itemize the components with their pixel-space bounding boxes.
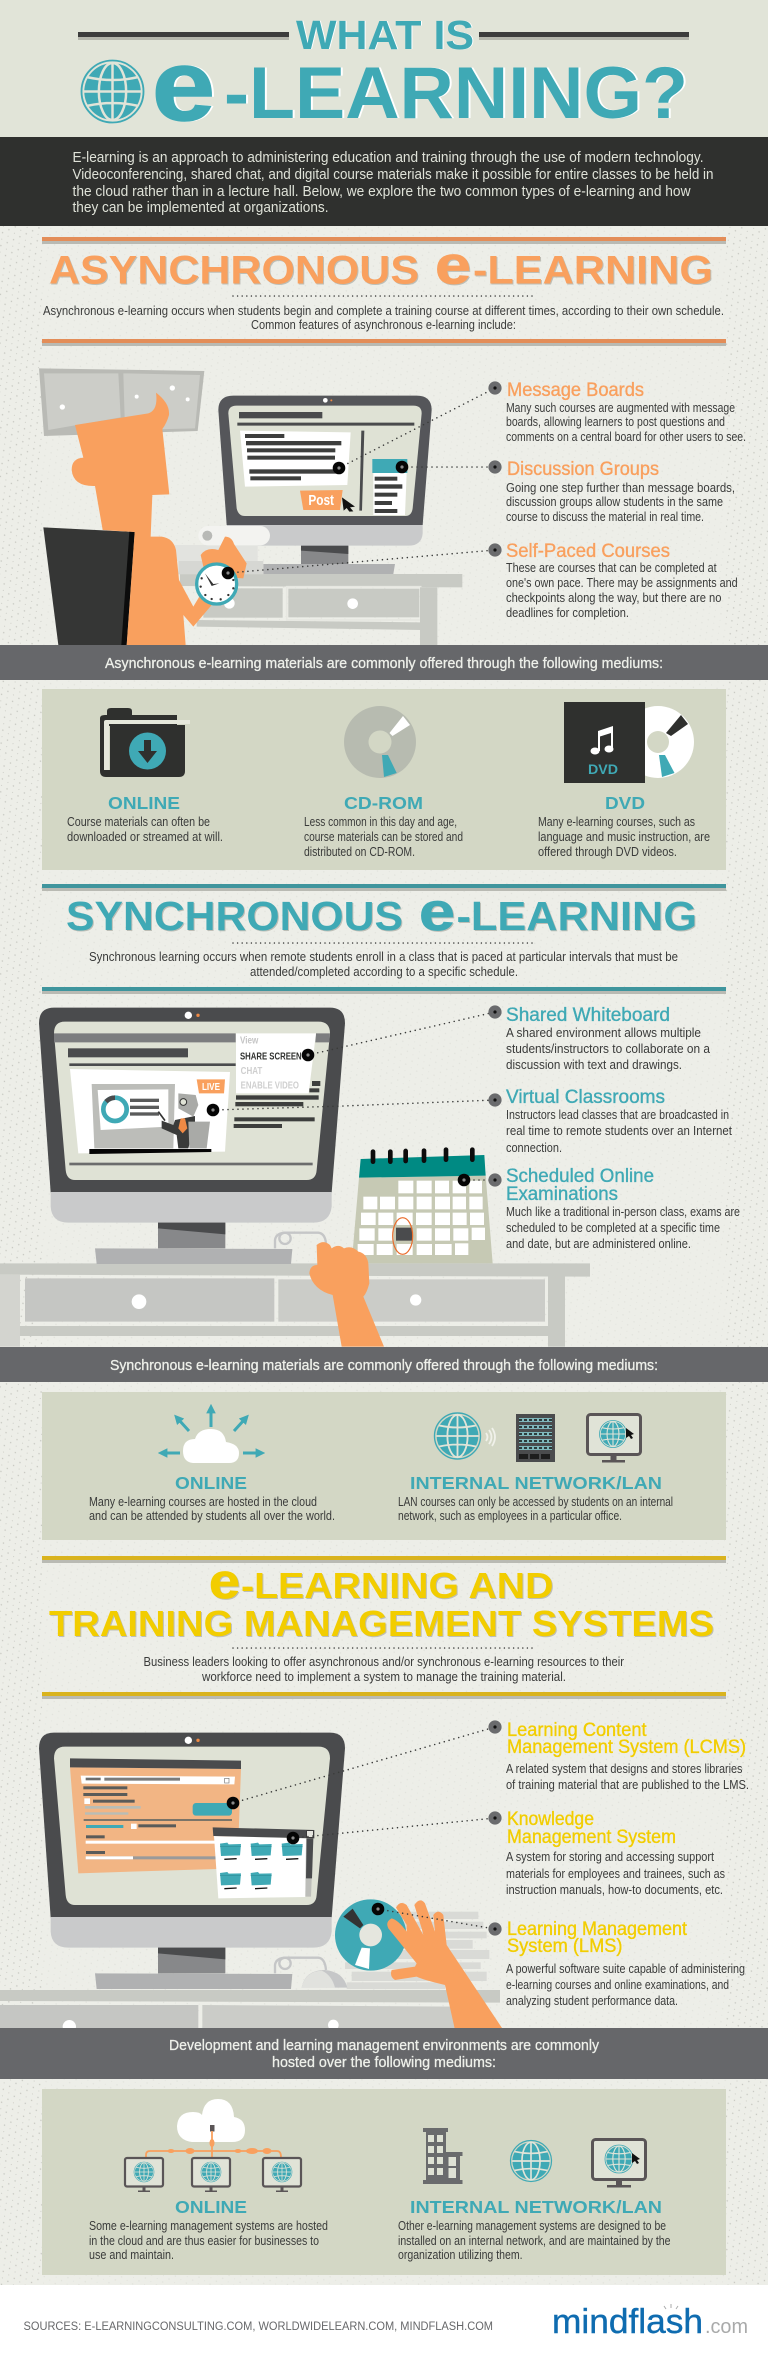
medium: online: [89, 2197, 328, 2262]
medium: online: Some e-learning management systems are hosted: [89, 2218, 328, 2233]
feature: shared whiteboard: discussion with text and drawings.: [506, 1057, 682, 1072]
hand: [309, 1242, 384, 1347]
medium: dvd: [538, 793, 710, 859]
person: [43, 393, 247, 645]
desk: [0, 1263, 590, 1347]
section heading: synchronous: attended/completed according to a specific schedule.: [250, 964, 518, 979]
band: synchronous mediums intro: [0, 1347, 768, 1382]
icon: globe: [434, 1413, 480, 1459]
section heading: synchronous: [42, 882, 726, 994]
feature: discussion groups: [506, 459, 735, 524]
footer: [24, 2303, 748, 2341]
title line: what is: WHAT IS: [296, 12, 474, 58]
medium: online: ONLINE: [175, 1473, 247, 1493]
feature: virtual classrooms: connection.: [506, 1140, 562, 1155]
post button: Post: [308, 493, 334, 509]
mouse cord: [275, 1233, 326, 1248]
intro band: E-learning is an approach to administering education and training through the use of modern technology.: [72, 150, 704, 166]
medium: dvd: Many e-learning courses, such as: [538, 814, 695, 829]
section heading: asynchronous: Common features of asynchronous e-learning include:: [251, 317, 516, 332]
hand: [387, 1900, 503, 2030]
feature: message boards: [506, 380, 746, 444]
menu: [236, 1033, 316, 1093]
callouts: asynchronous features: [222, 380, 746, 620]
logo: mindflash: .com: [705, 2316, 748, 2338]
feature: lms: Learning Management: [507, 1919, 688, 1940]
feature: knowledge management system: [506, 1809, 725, 1897]
medium: internal network: network, such as employees in a particular office.: [398, 1508, 622, 1523]
medium: internal network: LAN courses can only be accessed by students on an internal: [398, 1494, 673, 1509]
medium: internal network: INTERNAL NETWORK/LAN: [410, 1473, 662, 1493]
feature: scheduled online examinations: [506, 1166, 740, 1251]
window: [39, 368, 204, 436]
icon: dvd case: [564, 702, 694, 783]
feature: lms: System (LMS): [507, 1936, 622, 1957]
band: asynchronous mediums intro: [0, 645, 768, 680]
medium: cd-rom: distributed on CD-ROM.: [304, 844, 415, 859]
section heading: synchronous: Synchronous learning occurs when remote students enroll in a class that is paced at particular intervals that must be: [89, 949, 678, 964]
intro band: they can be implemented at organizations.: [72, 200, 328, 216]
monitor: [39, 1008, 345, 1264]
illustration: management system monitor, disc and hand: [0, 1733, 503, 2033]
live lecture: LIVE: [202, 1082, 220, 1093]
feature: virtual classrooms: Virtual Classrooms: [506, 1087, 665, 1108]
menu: CHAT: [241, 1066, 262, 1077]
feature: lcms: [506, 1720, 749, 1792]
sources: SOURCES: E-LEARNINGCONSULTING.COM, WORLDWIDELEARN.COM, MINDFLASH.COM: [24, 2321, 493, 2333]
section heading: management systems: [42, 1555, 726, 1699]
leader lines: [213, 1012, 495, 1180]
illustration: live class on monitor, calendar and hand: [0, 1008, 590, 1347]
screen content: [54, 1033, 330, 1165]
feature: lcms: Learning Content: [507, 1720, 647, 1741]
leader lines: [233, 1727, 495, 1929]
section heading: management systems: Business leaders looking to offer asynchronous and/or synchronous e-learning resources to their: [144, 1654, 625, 1669]
medium: online: [89, 1473, 335, 1523]
medium: online: and can be attended by students all over the world.: [89, 1508, 335, 1523]
feature: shared whiteboard: Shared Whiteboard: [506, 1005, 670, 1026]
desk: [180, 574, 462, 646]
band: synchronous mediums intro: Synchronous e-learning materials are commonly offered through the following mediums:: [110, 1357, 658, 1374]
icon: wifi signal: [486, 1428, 495, 1446]
icon: download folder: [100, 708, 190, 777]
feature: message boards: Message Boards: [507, 380, 644, 401]
callouts: management systems: [227, 1720, 749, 2008]
menu: ENABLE VIDEO: [241, 1081, 299, 1092]
feature: scheduled online examinations: Scheduled Online: [506, 1166, 654, 1187]
section heading: management systems: TRAINING MANAGEMENT SYSTEMS: [49, 1603, 714, 1644]
medium: online: [67, 793, 223, 844]
logo: mindflash: mindflash: [552, 2303, 703, 2341]
feature: knowledge management system: A system for storing and accessing support: [506, 1849, 714, 1864]
icon: cloud network: [125, 2099, 301, 2192]
medium: internal network: organization utilizing them.: [398, 2247, 522, 2262]
feature: lms: [506, 1919, 745, 2008]
header: [0, 0, 768, 142]
icon: office building: [423, 2128, 462, 2184]
panel: management mediums: [42, 2089, 726, 2275]
feature: self-paced courses: deadlines for completion.: [506, 605, 629, 620]
feature: virtual classrooms: real time to remote students over an Internet: [506, 1123, 732, 1138]
medium: internal network: [398, 2197, 670, 2262]
icon: dvd case: DVD: [588, 761, 618, 777]
title line: e-learning: -LEARNING?: [224, 53, 688, 134]
icon: lan monitor: [592, 2140, 646, 2188]
post button: [300, 490, 343, 510]
section heading: management systems: workforce need to implement a system to manage the training material.: [201, 1669, 566, 1684]
section heading: asynchronous: e: [435, 236, 471, 296]
orange application window: [70, 1758, 241, 1873]
icon: cd-rom: [344, 706, 416, 778]
medium: online: ONLINE: [108, 793, 180, 813]
feature: scheduled online examinations: and date, but are administered online.: [506, 1236, 691, 1251]
icon: lan monitor: [588, 1414, 640, 1462]
leader lines: [228, 388, 495, 573]
feature: discussion groups: Going one step further than message boards,: [506, 480, 735, 495]
medium: internal network: Other e-learning management systems are designed to be: [398, 2218, 666, 2233]
book stack: [345, 1912, 489, 1989]
section heading: synchronous: -LEARNING: [456, 893, 697, 939]
icon: globe: [510, 2140, 552, 2182]
feature: shared whiteboard: A shared environment allows multiple: [506, 1025, 701, 1040]
desk: [0, 1990, 500, 2033]
medium: online: ONLINE: [175, 2197, 247, 2217]
intro band: [0, 137, 768, 226]
medium: internal network: installed on an internal network, and are maintained by the: [398, 2233, 670, 2248]
intro band: Videoconferencing, shared chat, and digital course materials make it possible for entire classes to be held in: [72, 167, 714, 183]
feature: scheduled online examinations: Examinations: [506, 1184, 618, 1205]
folder window: [213, 1827, 314, 1898]
band: management mediums intro: hosted over the following mediums:: [272, 2054, 496, 2071]
section heading: management systems: e: [209, 1555, 240, 1609]
live lecture: [70, 1069, 230, 1154]
feature: knowledge management system: Knowledge: [507, 1809, 594, 1830]
medium: cd-rom: CD-ROM: [344, 793, 423, 813]
icon: globe: [82, 60, 144, 122]
section heading: asynchronous: -LEARNING: [473, 248, 713, 292]
feature: self-paced courses: [506, 541, 738, 620]
feature: scheduled online examinations: scheduled to be completed at a specific time: [506, 1220, 720, 1235]
medium: online: in the cloud and are thus easier for businesses to: [89, 2233, 319, 2248]
medium: dvd: offered through DVD videos.: [538, 844, 677, 859]
feature: self-paced courses: checkpoints along the way, but there are no: [506, 590, 722, 605]
title letter e: e: [152, 30, 215, 142]
band: asynchronous mediums intro: Asynchronous e-learning materials are commonly offered through the following mediums:: [105, 655, 663, 672]
feature: knowledge management system: Management System: [507, 1827, 676, 1848]
band: management mediums intro: Development and learning management environments are commonly: [169, 2037, 599, 2054]
calendar: [352, 1147, 493, 1263]
mouse and cord: [275, 1958, 347, 1988]
medium: online: downloaded or streamed at will.: [67, 829, 223, 844]
medium: dvd: language and music instruction, are: [538, 829, 710, 844]
section heading: synchronous: e: [419, 882, 455, 942]
monitor: [39, 1733, 345, 1989]
feature: shared whiteboard: [506, 1005, 711, 1072]
menu: SHARE SCREEN: [240, 1051, 302, 1062]
medium: dvd: DVD: [605, 793, 645, 813]
intro band: the cloud rather than in a lecture hall. Below, we explore the two common types of e-learning and how: [72, 184, 691, 200]
feature: knowledge management system: materials for employees and trainees, such as: [506, 1866, 725, 1881]
panel: asynchronous mediums: [42, 689, 726, 870]
feature: self-paced courses: These are courses that can be completed at: [506, 560, 717, 575]
feature: self-paced courses: Self-Paced Courses: [506, 541, 670, 562]
section heading: asynchronous: ASYNCHRONOUS: [49, 248, 419, 292]
icon: server: [516, 1414, 555, 1462]
panel: synchronous mediums: [42, 1392, 726, 1540]
clock: [197, 564, 237, 604]
feature: discussion groups: discussion groups allow students in the same: [506, 494, 723, 509]
feature: shared whiteboard: students/instructors to collaborate on a: [506, 1041, 711, 1056]
feature: lcms: Management System (LCMS): [507, 1737, 746, 1758]
books and scroll: [175, 526, 270, 574]
icon: cloud with arrows: [165, 1411, 258, 1463]
feature: discussion groups: Discussion Groups: [507, 459, 659, 480]
medium: cd-rom: [304, 793, 463, 859]
callouts: synchronous features: [207, 1005, 740, 1251]
section heading: synchronous: SYNCHRONOUS: [66, 893, 403, 939]
medium: internal network: INTERNAL NETWORK/LAN: [410, 2197, 662, 2217]
medium: internal network: [398, 1473, 673, 1523]
section heading: management systems: -LEARNING AND: [241, 1565, 554, 1606]
medium: cd-rom: course materials can be stored and: [304, 829, 463, 844]
feature: lms: analyzing student performance data.: [506, 1993, 678, 2008]
medium: cd-rom: Less common in this day and age,: [304, 814, 457, 829]
section heading: asynchronous: [42, 236, 726, 346]
menu: View: [240, 1035, 259, 1046]
feature: discussion groups: course to discuss the material in real time.: [506, 509, 704, 524]
band: management mediums intro: [0, 2028, 768, 2079]
monitor: [218, 396, 432, 574]
medium: online: Course materials can often be: [67, 814, 210, 829]
feature: virtual classrooms: [506, 1087, 732, 1155]
disc: [335, 1899, 406, 1971]
feature: knowledge management system: instruction manuals, how-to documents, etc.: [506, 1882, 723, 1897]
medium: online: use and maintain.: [89, 2247, 174, 2262]
medium: online: Many e-learning courses are hosted in the cloud: [89, 1494, 317, 1509]
illustration: student at desk with monitor: [39, 368, 462, 646]
